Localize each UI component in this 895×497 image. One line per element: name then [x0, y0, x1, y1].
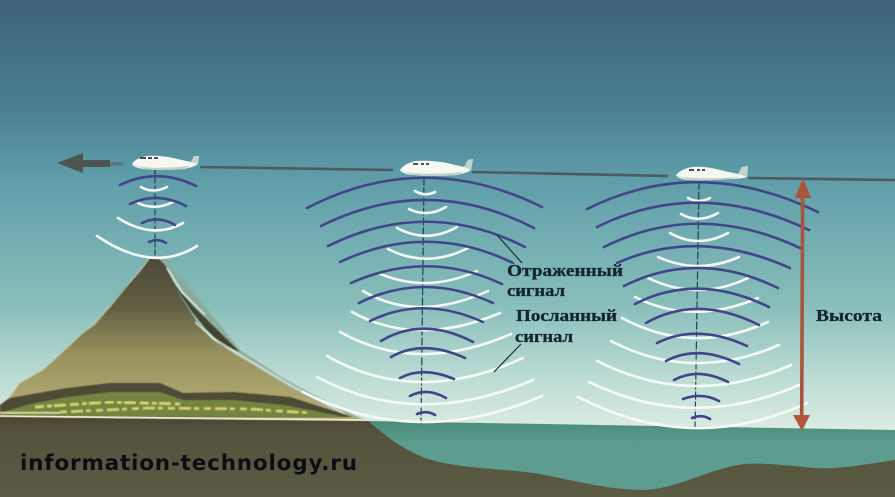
foothill dark band [0, 383, 353, 417]
pale outer slope [158, 258, 367, 421]
mountain body [0, 257, 367, 421]
label: reflected signal line 2: сигнал [507, 281, 566, 300]
reflected signal arcs [307, 178, 542, 415]
mountain [0, 257, 368, 421]
ridge shadow [172, 282, 240, 352]
sea [365, 421, 895, 497]
sent signal arcs [578, 198, 807, 428]
shoreline [0, 416, 368, 420]
foothill yellow patches [0, 402, 310, 413]
sent signal arcs [303, 191, 542, 422]
sent signal arcs [97, 187, 197, 258]
foothill green band [0, 392, 345, 417]
airplane 1 [132, 156, 199, 170]
website watermark: information-technology.ru [20, 451, 357, 476]
signal group 3 over sea [578, 182, 818, 430]
airplane 3 [676, 166, 748, 180]
label: sent signal: Посланный [516, 306, 617, 325]
snow ridge [167, 268, 345, 414]
seabed and ground [0, 417, 895, 497]
direction arrow [57, 153, 123, 173]
label: sent signal line 2: сигнал [515, 327, 574, 346]
signal group 2 over sea [303, 178, 542, 424]
label: height: Высота [816, 306, 883, 325]
reflected signal arcs [120, 176, 196, 243]
flight path line [200, 167, 895, 180]
beam axis [154, 170, 156, 256]
left lit edge [10, 258, 150, 397]
beam axis [695, 182, 699, 430]
height arrow [793, 178, 811, 431]
label: reflected signal: Отраженный [507, 261, 623, 280]
leader line: reflected signal [497, 235, 522, 263]
beam axis [421, 178, 424, 424]
airplane 2 [400, 159, 473, 176]
reflected signal arcs [587, 182, 818, 419]
leader line: sent signal [494, 344, 521, 372]
signal group 1 over mountain [97, 170, 197, 258]
